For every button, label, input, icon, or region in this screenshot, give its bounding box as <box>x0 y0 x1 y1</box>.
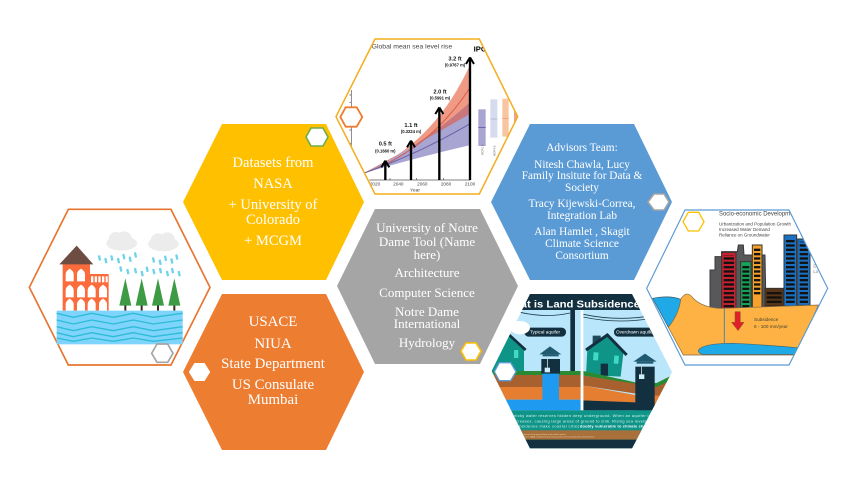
icon: water <box>57 311 183 344</box>
text: drivers: Urbanization and Population Growth <box>719 221 792 226</box>
text: advisors list: Advisors Team: <box>546 142 618 154</box>
text: advisors list: Integration Lab <box>547 210 617 222</box>
panel: partners <box>183 294 364 450</box>
icon: rain <box>98 252 181 276</box>
axis labels <box>370 182 475 192</box>
footer <box>526 440 637 448</box>
projection bands <box>363 63 471 173</box>
axes <box>349 90 471 180</box>
scenario labels: RCP2.6 <box>481 144 485 155</box>
text: university list: Architecture <box>395 265 460 280</box>
icon: small blue hexagon <box>494 363 516 381</box>
text: university list: here) <box>414 247 440 262</box>
arrow labels: 0.5 ft <box>379 142 392 148</box>
header <box>522 294 640 310</box>
text: subsidence: 6 - 100 mm/year <box>754 324 788 329</box>
text: subsidence <box>754 317 788 329</box>
chart title: Global mean sea level rise <box>372 43 452 50</box>
arrow labels: 1.1 ft <box>404 123 418 129</box>
axis labels: Year <box>410 187 420 193</box>
text: subsidence: Subsidence <box>754 317 779 322</box>
caption text: bsidence make coastal cities <box>519 425 579 429</box>
icon: trees <box>119 278 180 311</box>
text: partners list: NIUA <box>254 336 292 352</box>
text: drivers: Reliance on Groundwater <box>719 232 770 237</box>
text: advisors list <box>522 142 642 262</box>
scenario bars <box>478 99 518 146</box>
left house <box>492 335 526 372</box>
icon: small white hexagon <box>190 364 209 380</box>
text: university list: Hydrology <box>399 335 456 350</box>
panel: university <box>337 209 518 364</box>
icon: small green hexagon <box>306 128 328 146</box>
arrow labels: (0.9767 m) <box>445 62 466 67</box>
references strip <box>521 430 642 440</box>
groundwater <box>698 343 797 354</box>
arrow labels: (0.3224 m) <box>401 129 422 134</box>
text: partners list: State Department <box>221 356 326 372</box>
text: university list: Computer Science <box>379 285 475 300</box>
axis labels: 2060 <box>417 182 428 187</box>
text: advisors list: Consortium <box>555 250 609 262</box>
text: advisors list: Tracy Kijewski-Correa, <box>529 198 636 210</box>
icon: small grey hexagon <box>152 344 173 362</box>
right well <box>633 354 657 410</box>
icon: small yellow hexagon <box>461 343 481 360</box>
icon: building <box>59 246 109 311</box>
text: university list: Notre Dame <box>395 304 459 319</box>
text: university list: Dame Tool (Name <box>379 234 475 249</box>
label: overdrawn aquifer: Overdrawn aquifer <box>616 330 655 335</box>
icon: small grey hexagon <box>648 194 669 210</box>
text: datasets list: NASA <box>253 176 293 192</box>
axis labels: 2080 <box>441 182 452 187</box>
arrow labels: (0.1660 m) <box>375 148 396 153</box>
power lines <box>520 312 660 321</box>
right house <box>586 335 627 377</box>
references text: Source: NASA, Columbia Climate School, Union of Concerned Scientists, Earth Science <box>523 436 595 439</box>
references text <box>524 434 594 438</box>
scenario labels: RCP4.5 <box>492 145 496 156</box>
text: university list: University of Notre <box>376 220 478 235</box>
text: datasets list: + University of <box>229 197 318 213</box>
city buildings <box>710 235 810 309</box>
water body <box>653 297 681 327</box>
text: drivers: Increased Water Demand <box>719 227 770 232</box>
label: typical aquifer: Typical aquifer <box>530 330 560 335</box>
axis labels: 2020 <box>370 182 381 187</box>
divider <box>581 310 583 410</box>
text: cropped side note: D <box>813 264 816 269</box>
text: partners list <box>221 314 326 408</box>
panel: advisors <box>491 124 672 280</box>
icon: subsidence arrow <box>732 312 744 331</box>
text: datasets list <box>229 155 318 249</box>
left ground layers <box>490 371 581 410</box>
scenario labels <box>482 144 496 156</box>
text: datasets list: + MCGM <box>244 233 302 249</box>
text: cropped side note: Lo <box>813 269 819 274</box>
text: university list <box>376 220 478 350</box>
caption text: nicky water reserves hidden deep underground. When an aquifer is <box>514 414 651 418</box>
icon: small yellow hexagon <box>683 212 704 231</box>
arrow labels: 3.2 ft <box>448 56 462 62</box>
panel: socio-economic development illustration <box>647 210 828 365</box>
chart: global mean sea level rise <box>336 39 518 194</box>
icon: clouds <box>106 231 179 251</box>
land <box>668 294 818 355</box>
right ground layers <box>583 371 677 410</box>
heading: at is Land Subsidence <box>521 299 641 310</box>
cloud <box>510 321 530 334</box>
text: partners list: US Consulate <box>232 377 315 393</box>
caption text <box>514 414 651 429</box>
text: advisors list: Family Insitute for Data & <box>522 170 642 182</box>
text: drivers <box>719 222 791 236</box>
text: advisors list: Nitesh Chawla, Lucy <box>534 159 630 171</box>
text: partners list: Mumbai <box>248 392 298 408</box>
text: advisors list: Alan Hamlet , Skagit <box>534 226 631 238</box>
IPCC label: IPC <box>474 44 487 53</box>
arrows <box>381 57 474 180</box>
well pipe <box>724 308 725 344</box>
left well <box>539 346 561 400</box>
text: partners list: USACE <box>249 314 297 330</box>
text: advisors list: Society <box>565 182 599 194</box>
text: datasets list: Datasets from <box>233 155 314 171</box>
arrow labels: 2.0 ft <box>433 89 447 95</box>
label: typical aquifer <box>524 328 566 337</box>
text: cropped side note <box>813 264 819 274</box>
arrow labels: (0.5991 m) <box>430 95 451 100</box>
icon: small orange hexagon <box>340 107 362 127</box>
panel: flood illustration hexagon <box>29 209 210 365</box>
caption text: creases, causing large areas of ground to sink. Rising sea levels a <box>516 419 651 423</box>
axis labels: 2100 <box>465 182 476 187</box>
panel: datasets <box>183 124 364 280</box>
caption block <box>511 410 652 448</box>
label: overdrawn aquifer <box>614 328 661 337</box>
arrow labels <box>375 56 466 153</box>
axis labels: 2040 <box>393 182 404 187</box>
references text: describe the ongoing collapse of the world's aquifers <box>523 433 566 436</box>
text: university list: International <box>394 316 461 331</box>
text: datasets list: Colorado <box>246 212 300 228</box>
text: advisors list: Climate Science <box>545 238 619 250</box>
heading: Socio-economic Developmen <box>719 211 797 217</box>
caption text: doubly vulnerable to climate ch <box>580 425 644 429</box>
panel: land subsidence illustration <box>490 294 677 449</box>
